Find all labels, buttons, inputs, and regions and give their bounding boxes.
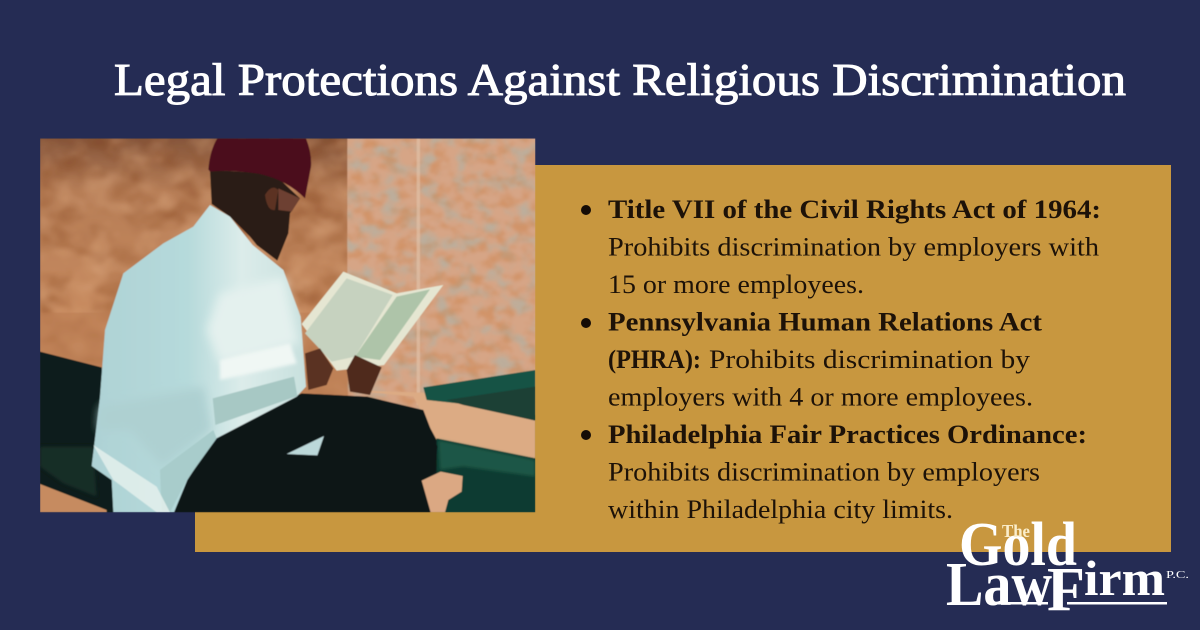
bullet item: Philadelphia ordinance: Prohibits discrimination by employers: [608, 458, 1040, 486]
prayer mat lower right: [437, 438, 535, 512]
photo: man reading a holy book: [40, 138, 536, 512]
bullet item: PHRA: employers with 4 or more employees.: [608, 382, 1033, 412]
logo: The Gold Law Firm P.C.: The: [1002, 521, 1030, 541]
logo: The Gold Law Firm P.C.: Gold: [959, 511, 1077, 579]
left wall: [40, 138, 348, 405]
cloth fold on lap: [287, 436, 324, 455]
bare foot: [422, 472, 463, 512]
bullet item: Philadelphia ordinance: [581, 420, 1087, 524]
logo: The Gold Law Firm P.C.: P.C.: [1166, 569, 1189, 581]
bullet item: PHRA: Pennsylvania Human Relations Act: [608, 308, 1042, 336]
bullet item: PHRA: Prohibits discrimination by: [709, 345, 1030, 374]
floor: [40, 313, 535, 458]
bullet item: Title VII: Prohibits discrimination by employers with: [608, 232, 1099, 262]
title: Legal Protections Against Religious Discrimination: [114, 55, 1126, 105]
bulleted list: [581, 195, 1101, 524]
bullet item: PHRA: [581, 308, 1042, 412]
open book: [302, 272, 443, 371]
bullet item: Title VII: [581, 195, 1101, 299]
logo: The Gold Law Firm P.C.: [946, 511, 1189, 624]
bullet item: Philadelphia ordinance: Philadelphia Fair Practices Ordinance:: [608, 420, 1087, 449]
head and beard: [210, 170, 300, 261]
prayer mat right: [423, 370, 535, 421]
hands: [305, 348, 382, 395]
right wall pillars: [347, 138, 536, 415]
black trousers: [170, 393, 437, 512]
bullet item: Title VII: 15 or more employees.: [608, 270, 864, 299]
prayer mat left: [40, 351, 108, 512]
bullet item: Philadelphia ordinance: within Philadelphia city limits.: [608, 495, 953, 524]
bullet item: PHRA: (PHRA):: [608, 345, 701, 374]
logo: The Gold Law Firm P.C.: Law: [946, 551, 1052, 619]
maroon cap: [208, 138, 311, 198]
bullet item: Title VII: Title VII of the Civil Rights Act of 1964:: [608, 195, 1101, 224]
panel: gold background: [195, 165, 1171, 552]
logo: The Gold Law Firm P.C.: irm: [1084, 550, 1165, 606]
white shawl: [92, 205, 306, 512]
logo: The Gold Law Firm P.C.: F: [1047, 556, 1085, 624]
